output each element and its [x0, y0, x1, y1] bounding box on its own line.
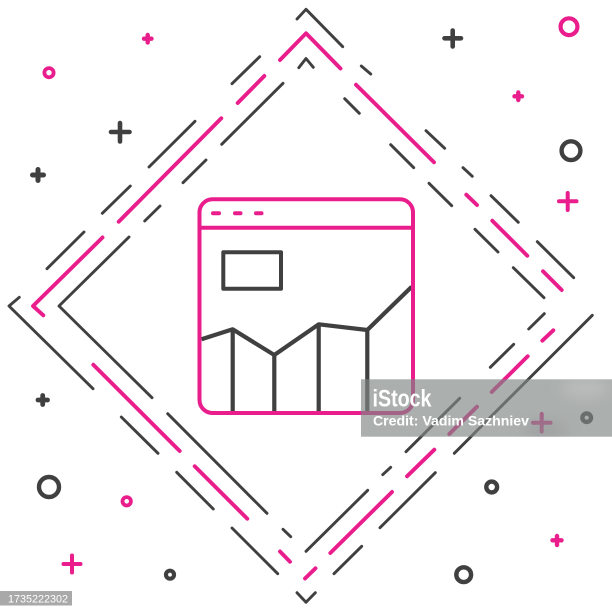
icon: browser window with chart — [200, 199, 413, 413]
decorative icon: small pink plus right — [514, 92, 522, 100]
decorative icon: dark plus top — [444, 30, 461, 46]
watermark banner — [361, 379, 612, 440]
decorative icon: dark ring bottom right — [456, 567, 471, 582]
image id number: 1735222302 — [8, 594, 68, 606]
decorative icon: pink plus under watermark — [533, 414, 550, 432]
decorative icon: dark plus far left — [32, 170, 44, 180]
decorative icon: pink ring top right — [561, 18, 577, 35]
image placeholder rectangle — [223, 252, 281, 289]
browser window outline — [200, 199, 413, 413]
decorative icon: dark plus lower left — [38, 396, 48, 404]
diamond frame: pink dashed lines — [33, 33, 562, 579]
decorative icon: small pink ring top left — [44, 68, 54, 77]
line chart with vertical bars — [202, 287, 412, 412]
decorative icon: small pink plus lower right — [552, 536, 562, 545]
decorative icon: dark ring under watermark — [582, 413, 591, 422]
decorative icon: dark ring right — [562, 141, 580, 160]
decorative icon: dark plus left — [111, 123, 130, 142]
decorative icon: dark ring lower left — [39, 477, 59, 497]
decorative icon: small pink ring lower left — [122, 497, 131, 505]
image id tag — [0, 591, 72, 606]
window control dots — [213, 211, 262, 215]
decorative icon: pink plus lower left — [64, 556, 80, 572]
decorative icon: small pink plus top left — [144, 35, 152, 42]
decorative icon: pink plus right — [559, 193, 576, 210]
decorative icon: dark ring lower right — [486, 482, 497, 492]
watermark credit text: Credit: Vadim Sazhniev — [373, 412, 529, 428]
watermark logo text: iStock — [372, 386, 432, 413]
decorative icon: small dark ring bottom — [166, 571, 174, 579]
